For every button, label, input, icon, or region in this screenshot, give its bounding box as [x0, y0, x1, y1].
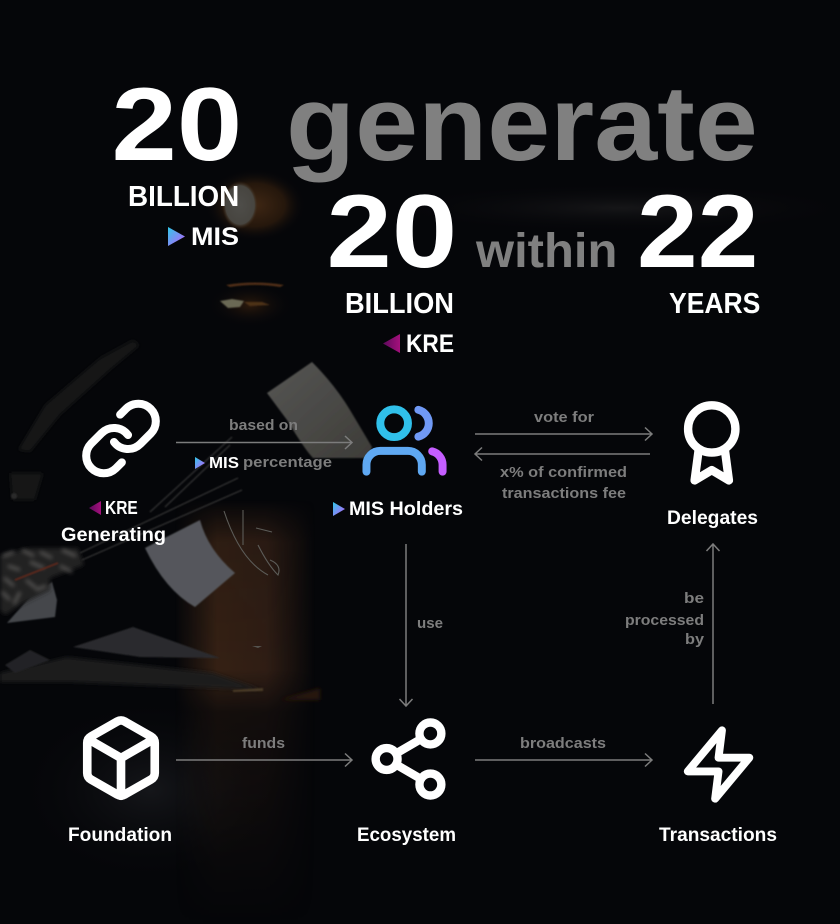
- label: MIS percentage: MIS: [209, 455, 239, 472]
- label: use: use: [417, 615, 443, 632]
- icon: cube: [87, 721, 155, 796]
- number: 20 billion MIS: 20: [112, 66, 242, 182]
- arrow: funds: [176, 735, 352, 766]
- word: within: within: [475, 224, 617, 278]
- number: 20 billion KRE: BILLION: [345, 287, 454, 319]
- background: dark light bulb photograph: [0, 176, 695, 832]
- label: vote for: vote for: [534, 409, 594, 426]
- label: be processed by: [625, 590, 705, 648]
- label: funds: funds: [242, 735, 285, 752]
- label: MIS percentage: percentage: [243, 454, 332, 471]
- node: Transactions: [659, 730, 777, 846]
- icon: lightning bolt: [688, 730, 749, 799]
- label: x% of confirmed transactions fee: [500, 464, 627, 502]
- icon: share nodes: [376, 722, 441, 796]
- label: broadcasts: broadcasts: [520, 735, 606, 752]
- label: Delegates: Delegates: [667, 507, 758, 529]
- number: 20 billion MIS: MIS: [191, 223, 239, 251]
- headline: [112, 64, 760, 358]
- node: Ecosystem: [357, 722, 456, 846]
- number: 20 billion MIS: [112, 66, 242, 251]
- label: x% of confirmed transactions fee: x% of confirmed: [500, 464, 627, 481]
- label: be processed by: processed: [625, 612, 704, 629]
- label: Transactions: Transactions: [659, 824, 777, 846]
- number: 20 billion KRE: KRE: [406, 330, 454, 358]
- number: 20 billion KRE: [326, 173, 457, 358]
- arrow: holders use ecosystem: [400, 544, 443, 706]
- node: Delegates: [667, 405, 758, 529]
- arrow: transaction fee back to holders: [475, 448, 650, 502]
- icon: award ribbon: [688, 405, 735, 480]
- node: MIS Holders: [333, 409, 463, 520]
- label: x% of confirmed transactions fee: transactions fee: [502, 485, 626, 502]
- number: 22 years: YEARS: [669, 287, 760, 319]
- label: KRE: [89, 498, 138, 518]
- label: Foundation: Foundation: [68, 824, 172, 846]
- label: Ecosystem: Ecosystem: [357, 824, 456, 846]
- icon: chain link: [86, 404, 156, 473]
- icon: users: [366, 409, 443, 472]
- label: based on: based on: [229, 417, 298, 434]
- node: Foundation: [68, 721, 172, 846]
- arrow: KRE Generating to MIS Holders: [176, 417, 352, 472]
- arrow: transactions processed by delegates: [625, 544, 720, 704]
- label: MIS Holders: MIS Holders: [349, 498, 463, 520]
- label: KRE: KRE: [105, 498, 138, 518]
- word: generate: generate: [286, 64, 758, 183]
- number: 20 billion KRE: 20: [326, 173, 457, 289]
- arrow: vote for: [475, 409, 652, 440]
- label: be processed by: be: [684, 590, 704, 607]
- node: KRE Generating: [61, 404, 166, 546]
- label: Generating: Generating: [61, 524, 166, 546]
- number: 20 billion MIS: BILLION: [128, 180, 239, 213]
- label: be processed by: by: [685, 631, 705, 648]
- arrow: broadcasts: [475, 735, 652, 766]
- number: 22 years: 22: [637, 172, 758, 289]
- label: MIS percentage: [195, 454, 332, 472]
